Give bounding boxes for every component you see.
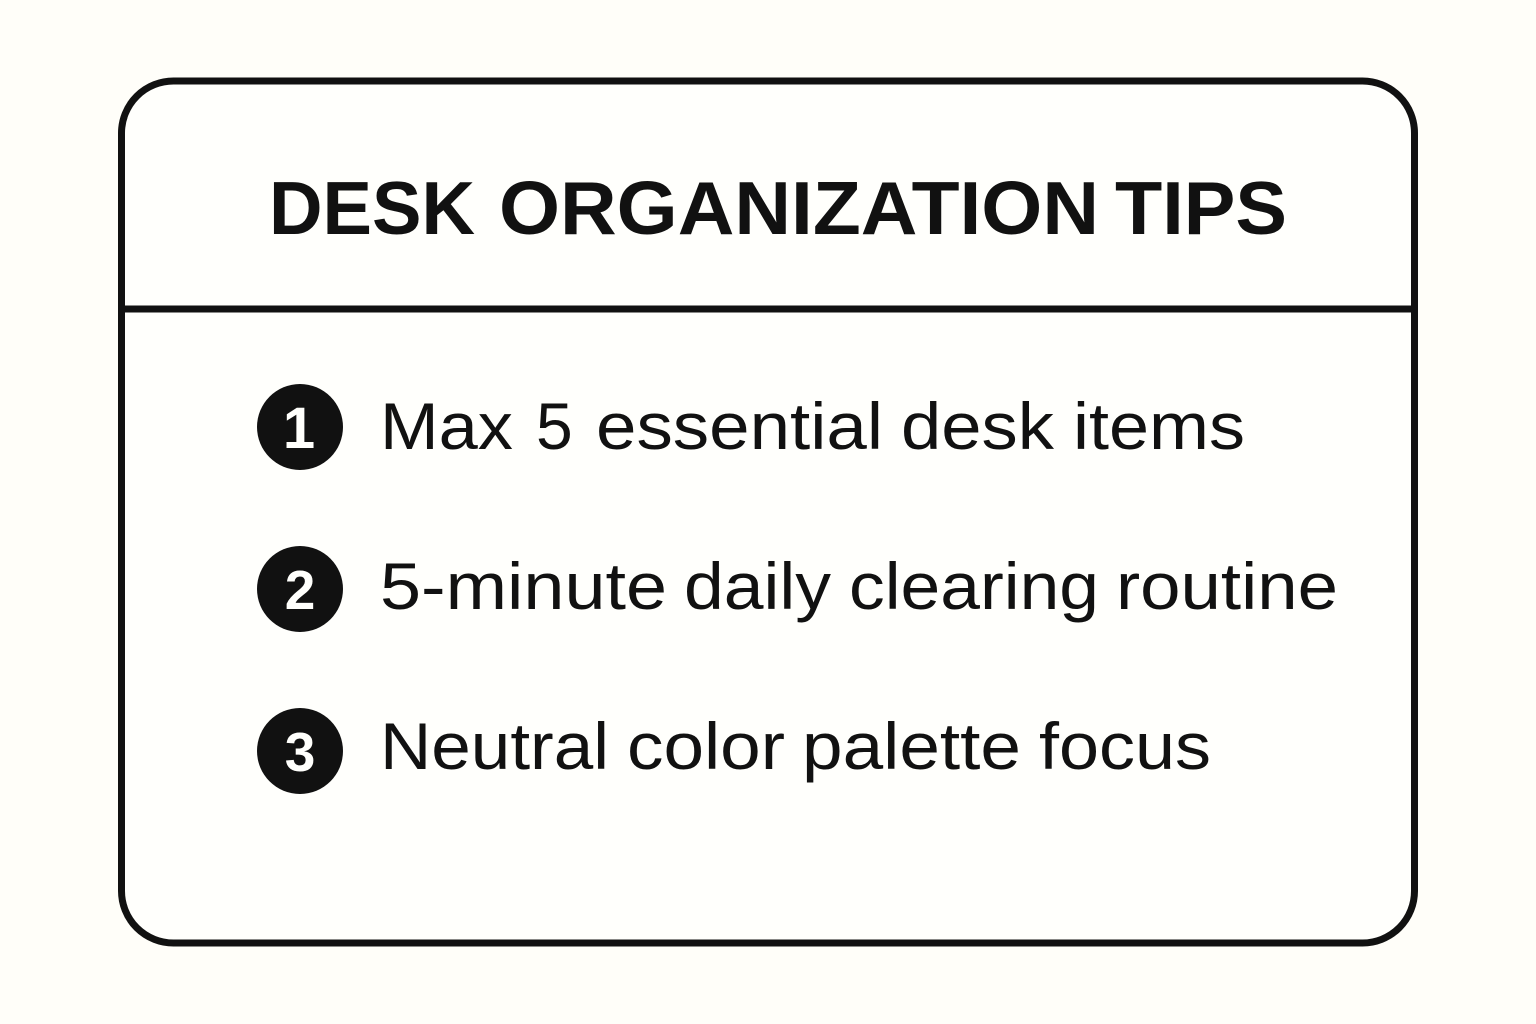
text: tip 2: daily [684,549,831,623]
panel: tips card [122,81,1414,943]
text: tip 2: routine [1116,549,1338,623]
text: tip 1 [380,389,1245,463]
text: tip 1: Max [380,389,513,463]
icon: number 3 badge: 3 [285,721,315,783]
text: tip 2: clearing [849,549,1099,623]
icon: number 2 badge: 2 [285,559,315,621]
text: tip 3: Neutral [380,709,609,783]
text: tip 1: 5 [536,389,573,463]
icon: number 1 badge [257,384,343,470]
text: tip 2: 5-minute [380,549,667,623]
title: DESK [269,166,475,250]
text: tip 3 [380,709,1211,783]
tip 2 [257,546,1338,632]
title [269,166,1287,250]
text: tip 3: color [627,709,785,783]
text: tip 1: items [1073,389,1245,463]
title: TIPS [1115,166,1287,250]
text: tip 3: focus [1039,709,1211,783]
text: tip 1: essential [596,389,883,463]
text: tip 3: palette [802,709,1021,783]
tip 1 [257,384,1245,470]
icon: number 2 badge [257,546,343,632]
tip 3 [257,708,1211,794]
icon: number 3 badge [257,708,343,794]
text: tip 1: desk [901,389,1055,463]
icon: number 1 badge: 1 [283,396,315,461]
text: tip 2 [380,549,1338,623]
title: ORGANIZATION [499,166,1099,250]
